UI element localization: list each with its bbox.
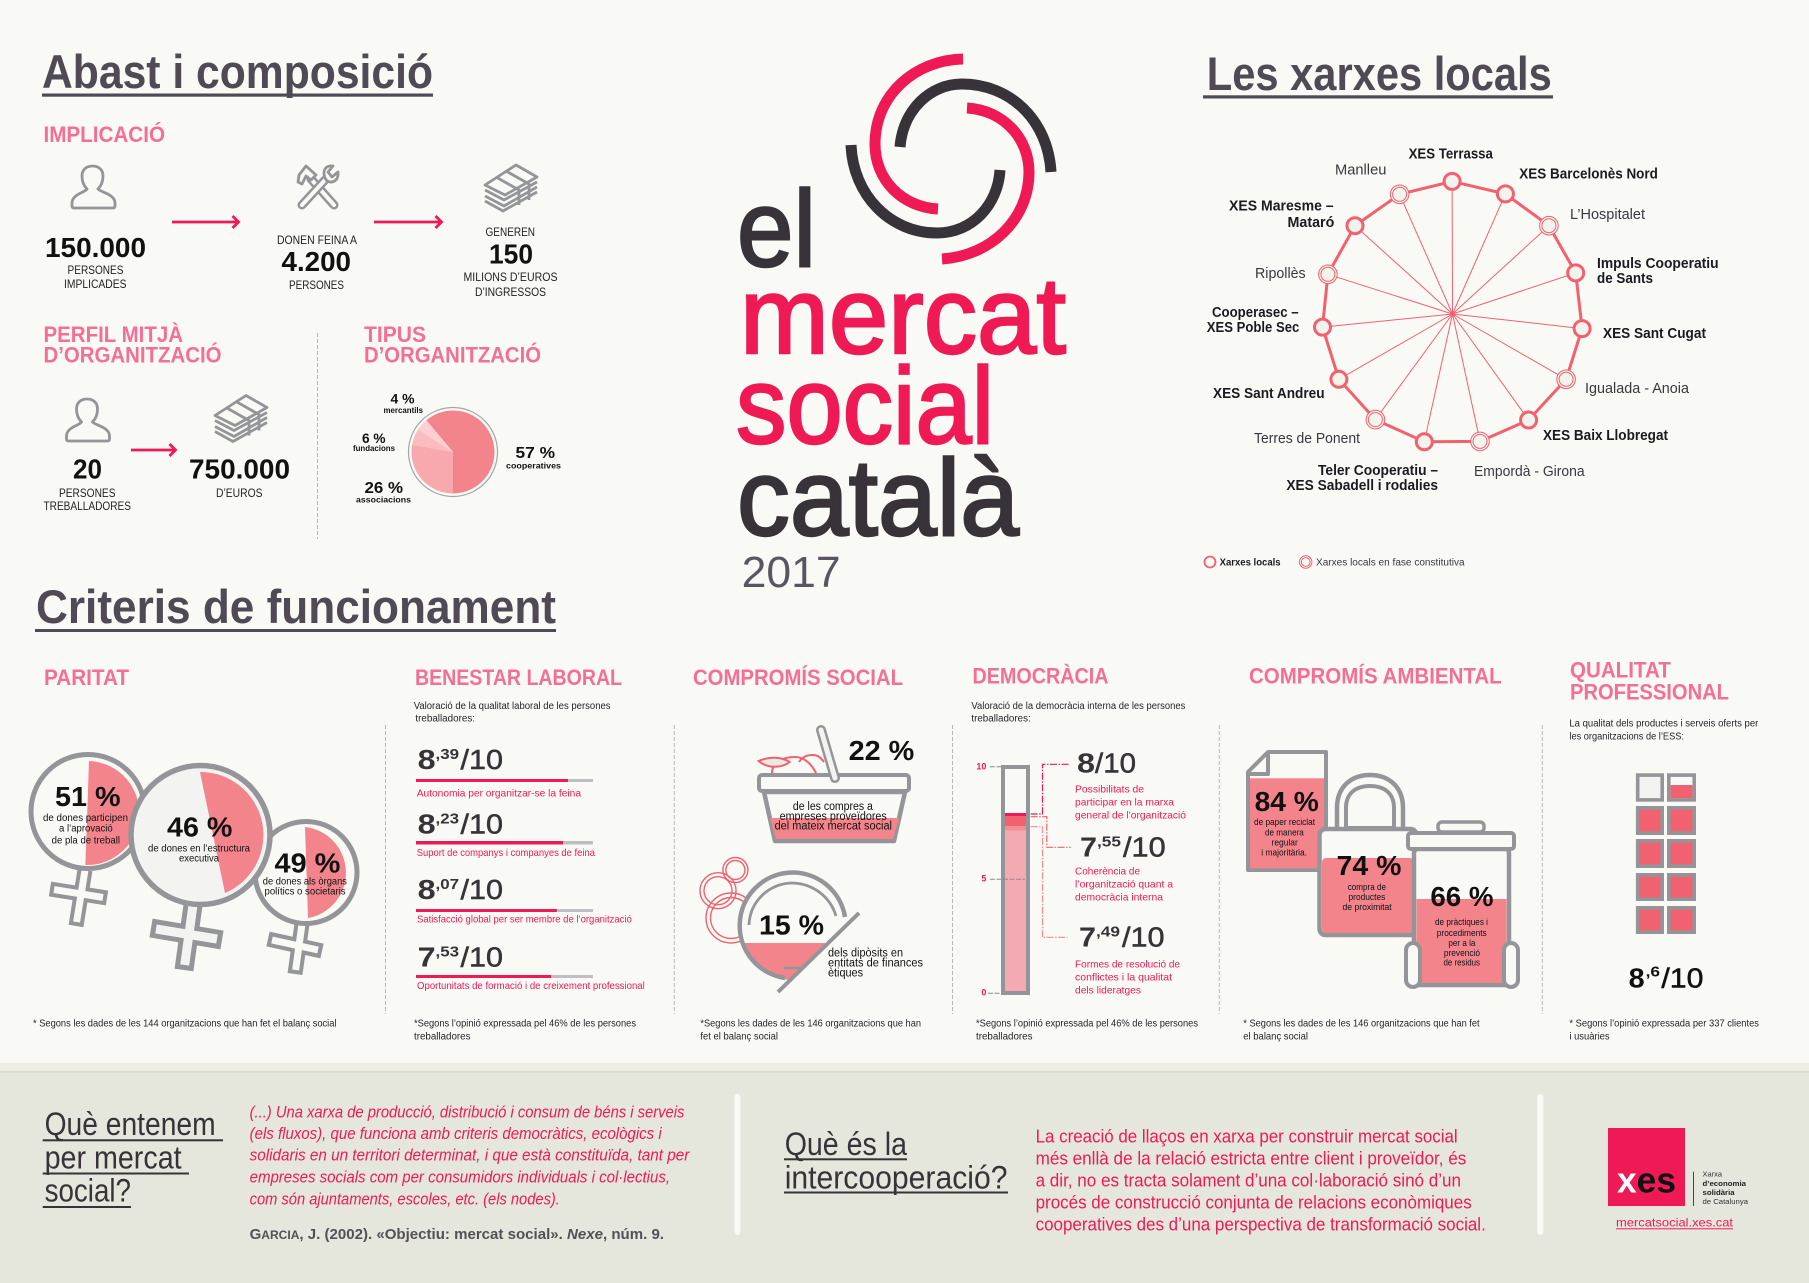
pie label: 4 % mercantils (384, 390, 424, 415)
icon: basket (759, 730, 909, 841)
stat: 84 % paper reciclat (1254, 786, 1319, 858)
network labels: Terres de Ponent (1254, 431, 1360, 447)
score: 8,07/10 Satisfacció: ,07 (436, 876, 459, 893)
stat: 74 % compra de productes (1336, 850, 1401, 912)
score: 7,49/10: Formes de resolució de (1075, 959, 1180, 971)
heading: Què és la intercooperació? (784, 1126, 1008, 1195)
icon: female symbol 49 % (255, 822, 357, 974)
stat: 74 % compra de productes: compra de (1348, 882, 1386, 892)
stat: 49 % (263, 847, 347, 898)
stat: 51 % (43, 781, 128, 847)
network labels: XES Poble Sec (1207, 320, 1299, 336)
subheading: Democràcia: DEMOCRÀCIA (972, 663, 1109, 688)
footnote: i usuàries (1569, 1031, 1610, 1042)
network labels: L’Hospitalet (1570, 207, 1645, 223)
score: 8,07/10 Satisfacció: 8 (418, 874, 436, 905)
stat: 150 milions d'euros: D’INGRESSOS (475, 285, 546, 299)
subheading: Perfil mitjà d'organització: D’ORGANITZACIÓ (44, 342, 222, 368)
logo wordmark: social (736, 345, 994, 467)
score: 8,39/10 Autonomia: ,39 (436, 746, 459, 763)
quote text: (els fluxos), que funciona amb criteris democràtics, ecològics i (250, 1124, 663, 1143)
footnote (700, 1019, 921, 1042)
stat: 49 %: de dones als òrgans (263, 877, 347, 888)
pie label: 6 % fundacions (353, 430, 396, 453)
stat: 22 % de les compres: empreses proveïdores (780, 811, 887, 823)
footnote (1569, 1019, 1759, 1042)
logo wordmark: el (737, 168, 816, 290)
stat: 49 %: polítics o societaris (264, 887, 346, 898)
footnote (976, 1019, 1198, 1042)
logo wordmark (736, 168, 1066, 559)
heading: Abast i composició: Abast i composició (42, 45, 433, 98)
logo: XES: d’economia (1702, 1179, 1747, 1188)
score: 7,49/10: ,49 (1096, 924, 1120, 941)
score: 8,39/10 Autonomia: 8 (418, 744, 436, 775)
subheading: Compromís ambiental: COMPROMÍS AMBIENTAL (1249, 663, 1502, 688)
heading: Què entenem per mercat social? (43, 1106, 223, 1209)
stat: 20 persones treballadores: PERSONES (59, 486, 116, 500)
stat: 4.200 persones: PERSONES (289, 278, 344, 292)
stat: 150.000 persones implicades: 150.000 (45, 232, 146, 263)
pie label: 57 % cooperatives: cooperatives (506, 460, 561, 470)
score: 8,23/10 Suport (416, 808, 595, 859)
stat: 46 %: de dones en l’estructura (148, 844, 250, 855)
panel: Qualitat professional (1569, 658, 1759, 1042)
panel: Compromís ambiental (1243, 663, 1518, 1042)
stat: 66 % pràctiques: per a la (1448, 938, 1475, 948)
panel: Democràcia (971, 663, 1198, 1042)
stat: 150 milions d'euros: MILIONS D’EUROS (464, 270, 558, 284)
thermometer chart: 5 (981, 874, 986, 884)
network labels: Mataró (1288, 215, 1334, 231)
stat: 74 % compra de productes: 74 % (1336, 850, 1401, 881)
stat: 46 %: executiva (179, 854, 219, 865)
stat: 49 %: 49 % (274, 847, 340, 878)
footnote: *Segons les dades de les 146 organitzacions que han (700, 1019, 921, 1030)
score: 8,6/10 (1629, 963, 1704, 994)
score: 7,49/10 (1075, 922, 1180, 997)
network labels: XES Sabadell i rodalies (1286, 478, 1438, 494)
stat: 750.000 d'euros (189, 454, 290, 500)
icon: paper sheet (1248, 752, 1326, 870)
citation: GARCIA, J. (2002). «Objectiu: mercat social». Nexe, núm. 9. (250, 1226, 664, 1243)
panel: bottom band (0, 1063, 1809, 1283)
legend: Xarxes locals en fase constitutiva (1316, 558, 1465, 569)
network labels: XES Sant Cugat (1603, 326, 1706, 342)
icon: money stack (485, 165, 537, 211)
score: 7,49/10: 7 (1079, 922, 1096, 953)
legend: Xarxes locals (1220, 558, 1281, 569)
footnote (1243, 1019, 1480, 1042)
stat: 51 %: de pla de treball (52, 836, 120, 847)
arrow (374, 216, 442, 228)
stat: 20 persones treballadores: TREBALLADORES (44, 499, 131, 513)
intro text: les organitzacions de l’ESS: (1569, 732, 1684, 743)
stat: 750.000 d'euros: 750.000 (189, 454, 290, 484)
stat: 15 % dels dipòsits: 15 % (759, 909, 824, 940)
quote text: solidaris en un territori determinat, i que està constituïda, tant per (250, 1146, 690, 1165)
footnote (414, 1019, 636, 1042)
stat: 22 % de les compres: 22 % (849, 735, 914, 766)
footnote: fet el balanç social (700, 1031, 778, 1042)
subheading: Qualitat professional (1570, 658, 1729, 704)
subheading: Tipus d'organització: D’ORGANITZACIÓ (364, 342, 541, 368)
pie label: 57 % cooperatives (506, 445, 561, 470)
stat: 51 %: a l’aprovació (59, 824, 113, 835)
score: 8/10: 8 (1077, 748, 1095, 779)
stat: 66 % pràctiques: de residus (1444, 958, 1480, 968)
logo year: 2017 (742, 548, 841, 597)
network wheel diagram (1314, 173, 1590, 451)
stat: 20 persones treballadores: 20 (73, 454, 102, 484)
score: 8,39/10 Autonomia: Autonomia per organitzar-se la feina (417, 788, 581, 800)
network labels: Empordà - Girona (1474, 464, 1585, 480)
logo: XES: de Catalunya (1702, 1197, 1749, 1206)
score: 8,23/10 Suport: Suport de companys i companyes de feina (417, 847, 595, 859)
score: 8,6/10: /10 (1661, 963, 1704, 994)
link: mercatsocial.xes.cat: mercatsocial.xes.cat (1616, 1216, 1734, 1230)
subheading: Perfil mitjà d'organització (44, 322, 222, 368)
subheading: Benestar laboral: BENESTAR LABORAL (415, 665, 622, 690)
panel: Paritat (31, 665, 357, 1030)
stat: 66 % pràctiques: 66 % (1430, 881, 1494, 912)
icon: money stack (215, 396, 267, 442)
intro text: La qualitat dels productes i serveis oferts per (1569, 719, 1759, 730)
footnote: treballadores (976, 1031, 1032, 1042)
paragraph: intercooperació: a dir, no es tracta solament d’una col·laboració sinó d’un (1036, 1171, 1461, 1191)
score: 8,39/10 Autonomia: /10 (460, 744, 503, 775)
intro text (971, 701, 1185, 725)
logo: XES (1608, 1128, 1749, 1206)
subheading: Tipus d'organització: TIPUS (364, 322, 426, 347)
network labels: XES Barcelonès Nord (1519, 167, 1658, 183)
footnote: treballadores (414, 1031, 470, 1042)
intro text: Valoració de la democràcia interna de les persones (971, 701, 1185, 712)
subheading: Perfil mitjà d'organització: PERFIL MITJÀ (44, 322, 183, 347)
squares chart: 8.6 of 10 (1638, 775, 1694, 932)
legend (1204, 556, 1465, 569)
subheading: Compromís social: COMPROMÍS SOCIAL (693, 665, 903, 690)
intro text (1569, 719, 1759, 743)
footnote: *Segons l’opinió expressada pel 46% de les persones (976, 1019, 1198, 1030)
heading: Què entenem per mercat social?: social? (45, 1173, 131, 1209)
icon: bubbles and coin jar (700, 858, 859, 992)
score: 8,07/10 Satisfacció: Satisfacció global per ser membre de l’organització (417, 914, 632, 926)
thermometer chart: 0 (981, 988, 986, 998)
stat: 15 % dels dipòsits: entitats de finances (828, 958, 923, 970)
network labels: Ripollès (1255, 266, 1306, 282)
heading: Criteris de funcionament: Criteris de funcionament (36, 580, 556, 633)
score: 8,07/10 Satisfacció: /10 (460, 874, 503, 905)
stat: 66 % pràctiques: prevenció (1444, 948, 1480, 958)
network labels: de Sants (1597, 271, 1653, 287)
quote text (250, 1102, 690, 1209)
stat: 84 % paper reciclat: i majoritària. (1261, 848, 1307, 858)
footnote: * Segons les dades de les 146 organitzacions que han fet (1243, 1019, 1480, 1030)
network labels: XES Sant Andreu (1213, 386, 1325, 402)
stat: 4.200 persones: 4.200 (282, 246, 351, 277)
score: 7,55/10: Coherència de (1075, 866, 1140, 878)
score: 7,53/10 Oportunitats (416, 942, 645, 992)
score: 8/10: Possibilitats de (1075, 784, 1144, 796)
network labels: Igualada - Anoia (1585, 381, 1690, 397)
network labels (1207, 147, 1719, 494)
intro text (414, 701, 611, 725)
stat: 750.000 d'euros: D’EUROS (216, 486, 262, 500)
arrow (131, 444, 176, 456)
score: 8/10 (1075, 748, 1186, 822)
stat: 22 % de les compres: de les compres a (793, 801, 873, 813)
stat: 84 % paper reciclat: 84 % (1255, 786, 1319, 817)
network labels: XES Terrassa (1409, 147, 1494, 163)
quote text: empreses socials com per consumidors individuals i col·lectius, (250, 1168, 670, 1187)
subheading: Paritat: PARITAT (44, 665, 130, 690)
score: 7,55/10: democràcia interna (1075, 892, 1163, 904)
score: 7,53/10 Oportunitats: 7 (418, 942, 436, 973)
stat: 84 % paper reciclat: de manera (1265, 828, 1304, 838)
pie label: 26 % associacions: 26 % (364, 480, 403, 497)
logo: XES: Xarxa (1702, 1170, 1723, 1179)
score: 8,07/10 Satisfacció (416, 874, 632, 926)
stat: 20 persones treballadores (44, 454, 131, 513)
score: 7,55/10: ,55 (1097, 834, 1121, 851)
score: 8,6/10: ,6 (1646, 964, 1660, 981)
panel: Abast i composició (42, 45, 561, 539)
score: 8,6/10: 8 (1629, 963, 1645, 994)
score: 7,53/10 Oportunitats: ,53 (436, 944, 459, 961)
score: 8,23/10 Suport: /10 (460, 808, 503, 839)
icon: waste bin (1406, 822, 1518, 987)
pie label: 6 % fundacions: 6 % (362, 430, 386, 446)
score: 8/10: participar en la marxa (1075, 797, 1174, 809)
score: 7,49/10: /10 (1122, 922, 1165, 953)
icon: person (72, 166, 115, 208)
score: 7,55/10: /10 (1123, 832, 1166, 863)
logo wordmark: mercat (740, 255, 1066, 377)
stat: 150.000 persones implicades: IMPLICADES (64, 277, 126, 291)
icon: female symbol 46 % (131, 766, 270, 970)
intro text: Valoració de la qualitat laboral de les persones (414, 701, 611, 712)
stat: 66 % pràctiques: procediments (1437, 928, 1487, 938)
subheading: Qualitat professional: PROFESSIONAL (1570, 679, 1729, 704)
connector lines (1031, 764, 1071, 937)
pie label: 26 % associacions: associacions (356, 494, 411, 504)
score: 8,23/10 Suport: 8 (418, 808, 436, 839)
heading: Les xarxes locals: Les xarxes locals (1207, 47, 1552, 100)
heading: Què és la intercooperació?: intercooperació? (785, 1159, 1008, 1195)
score: 7,55/10: l’organització quant a (1075, 879, 1173, 891)
paragraph: intercooperació: La creació de llaços en xarxa per construir mercat social (1036, 1127, 1458, 1147)
pie label: 4 % mercantils: mercantils (384, 406, 424, 415)
arrow (172, 216, 238, 228)
heading: Què entenem per mercat social?: per mercat (45, 1139, 182, 1175)
stat: 150.000 persones implicades: PERSONES (68, 263, 124, 277)
stat: 22 % de les compres: del mateix mercat social (775, 821, 892, 833)
stat: 66 % pràctiques (1430, 881, 1494, 968)
score: 8/10: /10 (1095, 748, 1136, 779)
icon: female symbol 51 % (31, 754, 145, 926)
stat: 150 milions d'euros (464, 225, 558, 299)
stat: 74 % compra de productes: de proximitat (1342, 902, 1392, 912)
paragraph: intercooperació (1036, 1127, 1486, 1234)
logo: XES: solidària (1702, 1188, 1735, 1197)
stat: 150.000 persones implicades (45, 232, 146, 291)
network labels: XES Maresme – (1229, 199, 1334, 215)
paragraph: intercooperació: cooperatives des d’una perspectiva de transformació social. (1036, 1214, 1486, 1234)
footnote: * Segons les dades de les 144 organitzacions que han fet el balanç social (33, 1019, 336, 1030)
network labels: Cooperasec – (1212, 305, 1299, 321)
subheading: Tipus d'organització (364, 322, 541, 368)
panel: Benestar laboral (414, 665, 645, 1042)
score: 7,53/10 Oportunitats: /10 (460, 942, 503, 973)
footnote: * Segons l’opinió expressada per 337 clientes (1569, 1019, 1759, 1030)
stat: 46 % (148, 812, 250, 865)
subheading: Qualitat professional: QUALITAT (1570, 658, 1671, 683)
network labels: Manlleu (1335, 163, 1386, 179)
panel: Les xarxes locals (1203, 47, 1719, 569)
intro text: treballadores: (971, 714, 1031, 725)
pie label: 6 % fundacions: fundacions (353, 444, 396, 453)
score: 7,55/10: 7 (1080, 832, 1097, 863)
stat: 51 %: de dones participen (43, 813, 128, 824)
stat: 66 % pràctiques: de pràctiques i (1435, 917, 1488, 927)
stat: 22 % de les compres (775, 735, 914, 833)
footnote: *Segons l’opinió expressada pel 46% de les persones (414, 1019, 636, 1030)
footnote: el balanç social (1243, 1031, 1308, 1042)
quote text: com són ajuntaments, escoles, etc. (els nodes). (250, 1190, 560, 1209)
icon: person (66, 399, 110, 441)
intro text: treballadores: (415, 714, 475, 725)
pie label: 4 % mercantils: 4 % (390, 390, 415, 406)
thermometer chart (976, 761, 1028, 998)
stat: 84 % paper reciclat: regular (1272, 838, 1298, 848)
logo: XES: xes (1617, 1159, 1676, 1200)
score: 7,49/10: conflictes i la qualitat (1075, 972, 1172, 984)
pie label: 57 % cooperatives: 57 % (516, 445, 555, 462)
stat: 4.200 persones: DONEN FEINA A (277, 233, 357, 247)
score: 7,49/10: dels lideratges (1075, 985, 1141, 997)
stat: 15 % dels dipòsits: dels dipòsits en (828, 948, 903, 960)
logo: el mercat social català 2017 (736, 59, 1066, 597)
quote text: (...) Una xarxa de producció, distribució i consum de béns i serveis (250, 1102, 685, 1121)
thermometer chart: 10 (976, 761, 986, 771)
network labels: Impuls Cooperatiu (1597, 256, 1719, 272)
panel: Compromís social (693, 665, 923, 1042)
heading: Què entenem per mercat social?: Què entenem (45, 1106, 216, 1142)
subheading: Implicació: IMPLICACIÓ (44, 122, 165, 147)
icon: tools (298, 166, 338, 205)
heading: Què és la intercooperació?: Què és la (785, 1126, 907, 1162)
icon: shopping bag (1320, 775, 1416, 935)
stat: 84 % paper reciclat: de paper reciclat (1254, 817, 1315, 827)
stat: 15 % dels dipòsits: ètiques (828, 968, 863, 980)
score: 7,55/10 (1075, 832, 1173, 904)
network labels: Teler Cooperatiu – (1318, 463, 1438, 479)
score: 7,53/10 Oportunitats: Oportunitats de formació i de creixement professional (417, 980, 645, 992)
stat: 150 milions d'euros: GENEREN (486, 225, 535, 239)
score: 8/10: general de l’organització (1075, 810, 1186, 822)
stat: 15 % dels dipòsits (759, 909, 923, 980)
pie chart: tipus d'organització (408, 408, 498, 496)
stat: 51 %: 51 % (55, 781, 121, 812)
stat: 4.200 persones (277, 233, 357, 292)
stat: 46 %: 46 % (167, 812, 232, 843)
score: 8,39/10 Autonomia (416, 744, 593, 800)
network labels: XES Baix Llobregat (1543, 428, 1668, 444)
logo wordmark: català (737, 437, 1019, 559)
pie label: 26 % associacions (356, 480, 411, 504)
paragraph: intercooperació: procés de construcció conjunta de relacions econòmiques (1036, 1193, 1472, 1213)
paragraph: intercooperació: més enllà de la relació estricta entre client i proveïdor, és (1036, 1149, 1466, 1169)
stat: 74 % compra de productes: productes (1348, 892, 1386, 902)
stat: 150 milions d'euros: 150 (489, 238, 533, 270)
score: 8,23/10 Suport: ,23 (436, 810, 459, 827)
logo icon: interlocking arcs (851, 59, 1051, 259)
